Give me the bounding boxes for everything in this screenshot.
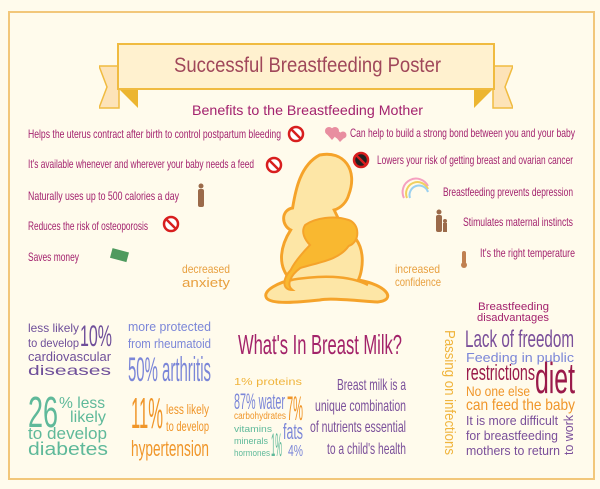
disadvantages list: for breastfeeding bbox=[466, 428, 558, 443]
stat: hypertension bbox=[131, 389, 209, 461]
disadvantages list: to work bbox=[561, 415, 576, 455]
milk composition: 1% proteins bbox=[234, 377, 302, 388]
left benefits: It's available whenever and wherever your baby needs a feed bbox=[28, 157, 254, 171]
disadvantages list: can feed the baby bbox=[466, 397, 575, 414]
subtitle: Benefits to the Breastfeeding Mother bbox=[192, 102, 423, 118]
icon: money bbox=[110, 248, 129, 262]
stat: cardiovascular: diseases bbox=[28, 362, 111, 378]
icon: hearts bbox=[325, 127, 346, 142]
stat: cardiovascular: less likely bbox=[28, 321, 79, 335]
decreased anxiety bbox=[182, 262, 231, 290]
icon: osteoporosis no bbox=[164, 217, 178, 231]
increased confidence: increased bbox=[395, 262, 440, 276]
illustration: mother and baby bbox=[264, 152, 390, 304]
right benefits bbox=[350, 126, 575, 260]
icon: uterus no bbox=[289, 127, 303, 141]
icon: woman bbox=[198, 184, 204, 207]
stat: arthritis: more protected bbox=[128, 319, 211, 334]
icon: thermometer bbox=[461, 251, 467, 268]
stat: hypertension: hypertension bbox=[131, 436, 209, 461]
stat: diabetes bbox=[28, 388, 108, 459]
increased confidence: confidence bbox=[395, 275, 441, 289]
disadvantages list: restrictions bbox=[466, 360, 535, 385]
milk composition: 87% water bbox=[234, 389, 285, 414]
disadvantages list bbox=[465, 326, 576, 458]
milk composition: 1% bbox=[271, 427, 282, 463]
icon: cancer no bbox=[354, 153, 368, 167]
stat: cardiovascular: cardiovascular bbox=[28, 349, 112, 364]
stat: diabetes: % less bbox=[59, 395, 105, 412]
disadvantages list: mothers to return bbox=[466, 443, 560, 458]
disadvantages list: It is more difficult bbox=[466, 413, 558, 428]
milk composition: 4% bbox=[288, 443, 303, 460]
stat: hypertension: 11% bbox=[131, 389, 163, 438]
milk composition: carbohydrates bbox=[234, 411, 286, 422]
milk description: unique combination bbox=[315, 398, 406, 415]
stat: arthritis: from rheumatoid bbox=[128, 336, 211, 351]
left benefits bbox=[28, 127, 281, 264]
passing on infections: Passing on infections bbox=[441, 330, 458, 455]
left benefits: Saves money bbox=[28, 250, 79, 264]
stat: cardiovascular: 10% bbox=[80, 320, 112, 353]
icon: rainbow bbox=[403, 179, 428, 198]
left benefits: Reduces the risk of osteoporosis bbox=[28, 219, 148, 233]
milk description: of nutrients essential bbox=[310, 419, 406, 436]
increased confidence bbox=[395, 262, 441, 289]
disadvantages heading bbox=[477, 301, 549, 324]
disadvantages list: Feeding in public bbox=[466, 350, 575, 365]
decreased anxiety: decreased bbox=[182, 262, 230, 276]
disadvantages heading: Breastfeeding bbox=[478, 301, 549, 313]
milk composition: minerals bbox=[234, 436, 268, 447]
milk composition: vitamins bbox=[234, 424, 272, 435]
left benefits: Helps the uterus contract after birth to control postpartum bleeding bbox=[28, 127, 281, 141]
stat: hypertension: less likely bbox=[166, 401, 209, 417]
milk composition: hormones bbox=[234, 448, 270, 459]
stat: diabetes: 26 bbox=[28, 388, 58, 437]
milk composition: fats bbox=[283, 419, 303, 444]
left benefits: Naturally uses up to 500 calories a day bbox=[28, 189, 179, 203]
stat: diabetes: to develop bbox=[28, 424, 107, 443]
all text: 50% arthritis bbox=[128, 351, 211, 389]
disadvantages list: No one else bbox=[466, 383, 530, 399]
stat: cardiovascular: to develop bbox=[28, 336, 79, 350]
title ribbon bbox=[99, 43, 513, 109]
icon: bottle no bbox=[267, 158, 281, 172]
stat: hypertension: to develop bbox=[166, 418, 209, 434]
milk description: to a child's health bbox=[327, 441, 406, 458]
stat: cardiovascular bbox=[28, 320, 112, 378]
stat: diabetes: likely bbox=[70, 409, 106, 426]
stat: diabetes: diabetes bbox=[28, 439, 108, 459]
milk composition bbox=[234, 377, 303, 463]
all text: 7% bbox=[287, 390, 303, 428]
decreased anxiety: anxiety bbox=[182, 275, 231, 290]
disadvantages heading: disadvantages bbox=[477, 312, 549, 324]
heading: what's in breast milk: What's In Breast Milk? bbox=[238, 329, 402, 360]
stat: arthritis bbox=[128, 319, 211, 389]
title: Successful Breastfeeding Poster bbox=[174, 54, 441, 77]
icon: mother child bbox=[436, 210, 447, 232]
milk description bbox=[310, 377, 406, 458]
milk description: Breast milk is a bbox=[337, 377, 406, 394]
